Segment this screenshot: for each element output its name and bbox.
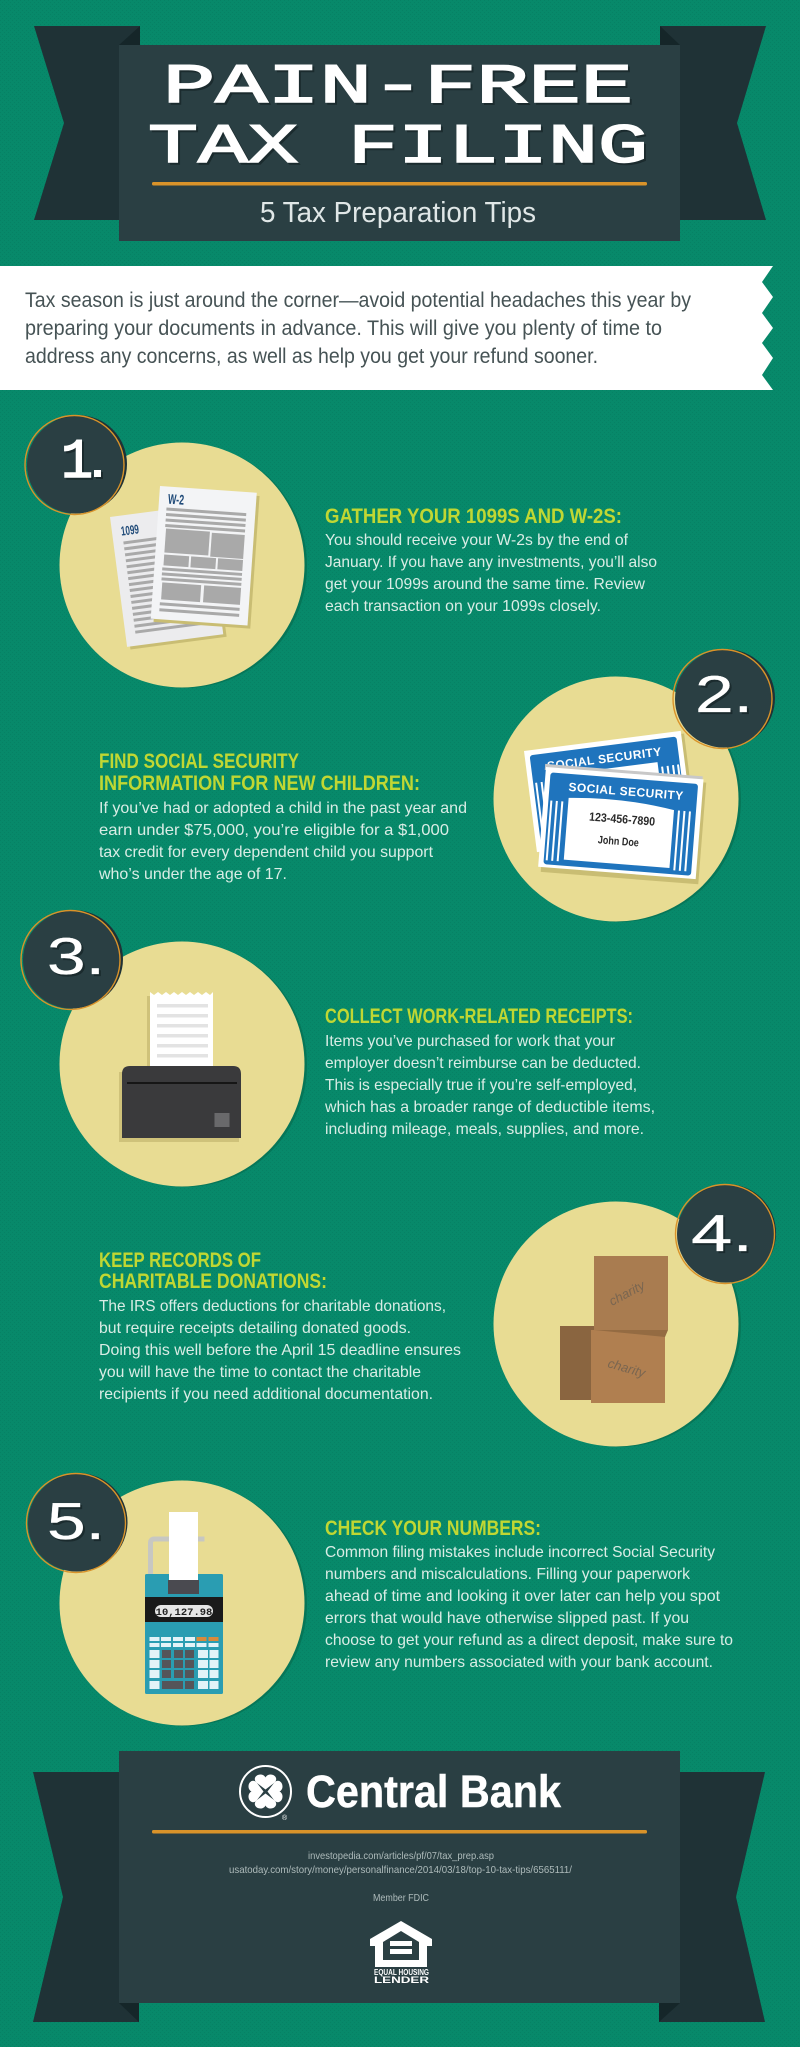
icon: social security cards: John Doe	[597, 834, 639, 849]
step 5 text: Common filing mistakes include incorrect Social Security	[325, 1544, 715, 1561]
circle 2	[494, 676, 741, 922]
step 4 text: KEEP RECORDS OF	[99, 1249, 261, 1272]
step 3 text: employer doesn’t reimburse can be deducted.	[325, 1055, 641, 1072]
title: PAIN-FREE	[165, 57, 635, 121]
step 5 text: ahead of time and looking it over later can help you spot	[325, 1588, 721, 1605]
subtitle: 5 Tax Preparation Tips	[260, 197, 536, 229]
footer ribbon banner	[33, 1751, 765, 2022]
step 5 text: errors that would have otherwise slipped past. If you	[325, 1610, 689, 1627]
badge 1: 1	[61, 430, 93, 494]
badge 2: 2.	[695, 666, 753, 724]
badge 4	[676, 1184, 776, 1284]
icon: charity boxes: charity	[606, 1355, 649, 1381]
badge 4: 4.	[691, 1205, 753, 1263]
badge 4: 4.	[693, 1207, 755, 1265]
step 4 text: CHARITABLE DONATIONS:	[99, 1270, 327, 1293]
intro banner: Tax season is just around the corner—avoid potential headaches this year by	[25, 289, 691, 312]
step 2 text	[98, 750, 467, 883]
sources: investopedia.com/articles/pf/07/tax_prep.asp	[308, 1850, 494, 1862]
icon: social security cards: SOCIAL SECURITY	[568, 780, 684, 803]
step 2 text: earn under $75,000, you’re eligible for a $1,000	[99, 822, 449, 839]
logo: Central Bank	[240, 1766, 562, 1822]
step 2 text: INFORMATION FOR NEW CHILDREN:	[99, 772, 420, 795]
step 5 text: review any numbers associated with your bank account.	[325, 1654, 713, 1671]
icon: tax documents	[110, 486, 260, 650]
badge 5	[26, 1473, 128, 1572]
icon: social security cards	[524, 731, 707, 884]
intro banner: address any concerns, as well as help you get your refund sooner.	[25, 345, 598, 368]
title: TAX FILING	[148, 115, 648, 179]
step 3 text: which has a broader range of deductible items,	[324, 1099, 655, 1116]
icon: adding machine calculator	[145, 1512, 223, 1694]
step 5 text: numbers and miscalculations. Filling your paperwork	[325, 1566, 691, 1583]
step 4 text: Doing this well before the April 15 deadline ensures	[99, 1342, 461, 1359]
circle 5	[60, 1480, 307, 1726]
step 3 text: including mileage, meals, supplies, and more.	[325, 1121, 644, 1138]
logo: Central Bank: Central Bank	[306, 1766, 562, 1817]
intro banner: preparing your documents in advance. This will give you plenty of time to	[25, 317, 662, 340]
header ribbon banner	[34, 26, 766, 241]
step 4 text: you will have the time to contact the charitable	[99, 1364, 421, 1381]
circle 4	[494, 1202, 741, 1447]
title	[148, 55, 650, 181]
step 4 text: but require receipts detailing donated goods.	[99, 1320, 411, 1337]
circle 3	[60, 942, 307, 1187]
badge 2	[673, 649, 775, 748]
step 3 text: This is especially true if you’re self-employed,	[325, 1077, 637, 1094]
step 5 text: CHECK YOUR NUMBERS:	[325, 1517, 541, 1540]
logo: Central Bank: ®	[282, 1814, 288, 1822]
step 1 text: You should receive your W-2s by the end of	[325, 532, 629, 549]
sources	[229, 1850, 572, 1876]
icon: equal housing lender	[370, 1921, 432, 1986]
icon: adding machine calculator: 10,127.98	[156, 1607, 212, 1619]
step 3 text: COLLECT WORK-RELATED RECEIPTS:	[325, 1005, 633, 1028]
icon: receipt printer	[119, 992, 241, 1142]
icon: tax documents: W-2	[168, 491, 185, 508]
footer rule	[152, 1830, 647, 1834]
sources: usatoday.com/story/money/personalfinance/2014/03/18/top-10-tax-tips/6565111/	[229, 1864, 572, 1876]
icon: social security cards: SOCIAL SECURITY	[546, 745, 662, 773]
icon: equal housing lender: LENDER	[374, 1975, 429, 1986]
badge 5: 5.	[47, 1493, 105, 1551]
step 4 text: recipients if you need additional documentation.	[99, 1386, 433, 1403]
step 2 text: If you’ve had or adopted a child in the past year and	[99, 800, 467, 817]
step 1 text	[325, 505, 657, 615]
badge 1	[25, 415, 127, 514]
circle 1	[60, 442, 307, 688]
step 3 text: Items you’ve purchased for work that your	[325, 1033, 616, 1050]
badge 2: 2.	[697, 668, 755, 726]
title rule	[152, 182, 647, 186]
badge 3: 3.	[47, 928, 105, 986]
icon: tax documents: 1099	[120, 521, 140, 539]
step 1 text: get your 1099s around the same time. Review	[325, 576, 645, 593]
step 3 text	[324, 1005, 655, 1138]
badge 1: 1	[63, 432, 95, 496]
badge 3: 3.	[49, 930, 107, 988]
badge 5: 5.	[49, 1495, 107, 1553]
step 5 text	[325, 1517, 733, 1671]
icon: charity boxes: charity	[606, 1277, 649, 1309]
title: TAX FILING	[150, 117, 650, 181]
title: PAIN-FREE	[163, 55, 633, 119]
step 2 text: tax credit for every dependent child you support	[99, 844, 434, 861]
step 1 text: GATHER YOUR 1099S AND W-2S:	[325, 505, 622, 528]
badge 3	[21, 910, 123, 1010]
step 2 text: FIND SOCIAL SECURITY	[99, 750, 299, 773]
icon: social security cards: 123-456-7890	[589, 810, 656, 829]
icon: charity boxes	[560, 1256, 668, 1403]
step 1 text: each transaction on your 1099s closely.	[325, 598, 601, 615]
member FDIC: Member FDIC	[373, 1892, 429, 1904]
step 4 text	[99, 1249, 461, 1403]
step 4 text: The IRS offers deductions for charitable donations,	[99, 1298, 446, 1315]
step 1 text: January. If you have any investments, you’ll also	[325, 554, 657, 571]
step 5 text: choose to get your refund as a direct deposit, make sure to	[325, 1632, 733, 1649]
step 2 text: who’s under the age of 17.	[98, 866, 287, 883]
intro banner	[0, 266, 773, 390]
icon: equal housing lender: EQUAL HOUSING	[374, 1967, 429, 1977]
